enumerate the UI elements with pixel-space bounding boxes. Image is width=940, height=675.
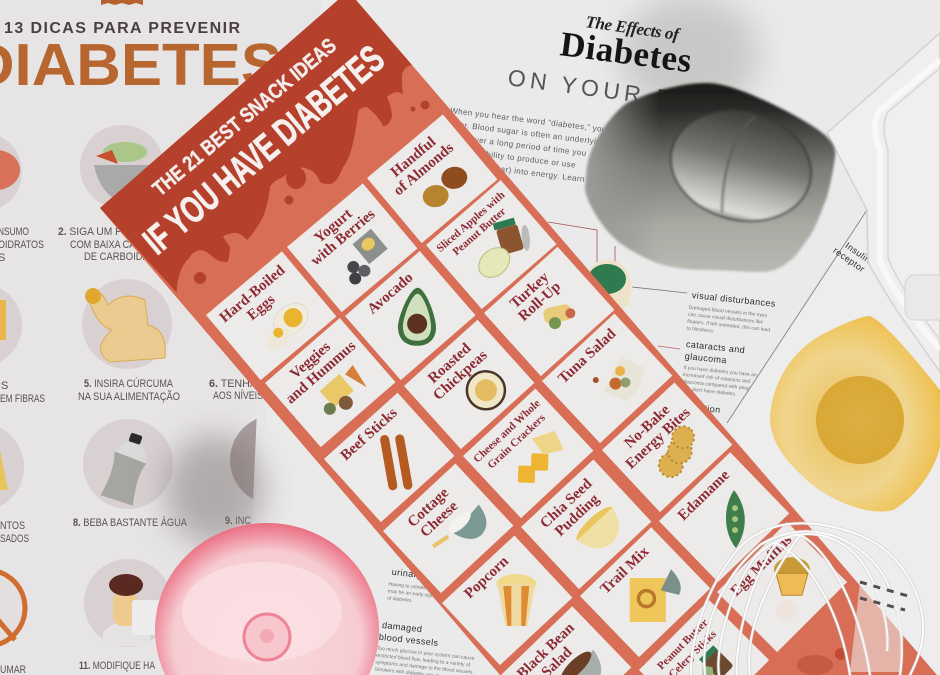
tile: black bean salad [501, 606, 631, 675]
heading: 13 dicas: 13 DICAS PARA PREVENIR [4, 20, 240, 37]
text: lower left notes: blood vessels [378, 632, 439, 648]
text: visual disturbances: can cause visual disturbances like [688, 312, 764, 326]
tip captions: 11. MODIFIQUE HA [79, 660, 156, 672]
tile: veggies and hummus: and Hummus [283, 338, 359, 407]
decorative ribbon [101, 0, 143, 5]
text: cataracts and glaucoma: glaucoma compared with people [682, 379, 754, 392]
tip captions: 6. TENHA [209, 378, 258, 390]
dark melted header [100, 0, 412, 293]
tile: tuna salad: Tuna Salad [555, 325, 620, 387]
tile: turkey roll-up: Roll-Up [516, 279, 564, 325]
icon: muffin and egg [746, 539, 831, 625]
text: insulin receptor: receptor [831, 245, 867, 274]
text: lower left notes: urinary [391, 567, 423, 580]
text: visual disturbances: floaters. If left untreated, this can lead [687, 319, 771, 333]
tube connector [850, 582, 908, 672]
tile: edamame [659, 452, 789, 582]
text: lower left notes: damaged [382, 620, 423, 634]
icon: water bottle [100, 429, 154, 506]
tile: trail mix [580, 527, 710, 657]
intro paragraph [443, 106, 608, 186]
tile: cheese and whole grain crackers: Cheese and Whole [471, 397, 543, 465]
icon: celery and jar [685, 645, 738, 675]
text: cataracts and glaucoma [679, 339, 760, 418]
pink cap [155, 523, 379, 675]
icon: apples and jar [461, 206, 542, 285]
gray pointer line [632, 287, 687, 293]
tile: cottage cheese: Cheese [417, 498, 461, 541]
clear tubing [691, 523, 923, 675]
tile: popcorn [442, 535, 572, 665]
shadow cast by device [620, 0, 760, 115]
tile: popcorn: Popcorn [461, 553, 512, 602]
intro paragraph: y's ability to produce or use [468, 148, 577, 170]
icon: left food [0, 150, 20, 190]
icon: energy bites [646, 422, 708, 482]
tile: yogurt with berries: Yogurt [311, 206, 356, 247]
icon: avocado [398, 287, 437, 346]
tile: chia seed pudding: Chia Seed [537, 475, 596, 532]
text: visual disturbances: Damaged blood vessels in the eyes [688, 305, 768, 319]
red pointer line [658, 346, 680, 349]
side shading [585, 83, 835, 272]
tip captions: COM BAIXA CARGA [70, 239, 156, 251]
text: insulin receptor [831, 236, 873, 274]
icon: salad bowl [94, 142, 152, 202]
heading: on your: ON YOUR B [506, 64, 677, 112]
icon: chickpea bowl [459, 363, 513, 417]
icon: no smoking [0, 570, 25, 646]
text: cataracts and glaucoma: If you have diabetes you have an [683, 365, 757, 379]
text: visual disturbances: visual disturbances [691, 290, 776, 309]
tip captions: 5. INSIRA CÚRCUMA [84, 377, 174, 390]
tile: chia seed pudding [521, 459, 651, 589]
tile: sliced apples with peanut butter [426, 180, 556, 309]
tile: yogurt with berries [287, 183, 417, 312]
tile: egg muffins: Egg Muffins [728, 532, 795, 600]
tip captions: DE CARBOIDRATOS [84, 251, 174, 263]
icon: bean salad [557, 645, 611, 675]
tile: yogurt with berries: with Berries [308, 206, 379, 269]
tile: turkey roll-up [484, 247, 614, 376]
text: visual disturbances: to blindness. [686, 326, 715, 335]
tile: sliced apples with peanut butter: Sliced Apples with [434, 189, 507, 255]
tile: roasted chickpeas: Chickpeas [430, 347, 491, 404]
icon: yogurt and berries [333, 229, 393, 287]
text: cataracts and glaucoma: glaucoma [684, 351, 727, 365]
tip captions: 2. SIGA UM PLANO [58, 226, 150, 238]
icon: edamame pod [726, 490, 745, 548]
icon: crackers [502, 424, 571, 491]
icon: trail mix bag [608, 553, 695, 640]
tile: edamame: Edamame [675, 467, 733, 524]
yellow cell shape [770, 316, 940, 511]
heading: the effects of: The Effects of [584, 12, 682, 44]
tile: hard-boiled eggs: Eggs [244, 292, 278, 324]
tile: handful of almonds: of Almonds [391, 140, 457, 199]
tile: trail mix: Trail Mix [598, 543, 653, 598]
intro paragraph: ar. Blood sugar is often an underlying [459, 120, 606, 147]
cap centre dot [260, 629, 274, 643]
icon: popcorn [496, 574, 536, 626]
glucose monitor device [585, 83, 835, 272]
icon: veggies [312, 364, 373, 423]
device dome [659, 96, 823, 236]
icon: salad bowl [592, 348, 653, 409]
tile: cottage cheese [383, 463, 513, 593]
tile: no-bake energy bites [602, 382, 732, 512]
tile: roasted chickpeas: Roasted [425, 340, 475, 387]
tile: chia seed pudding: Pudding [552, 491, 603, 540]
tile: cottage cheese: Cottage [405, 485, 452, 531]
tip captions: NA SUA ALIMENTAÇÃO [78, 390, 180, 403]
text: lower left notes: of diabetes. [387, 595, 413, 604]
tile: sliced apples with peanut butter: Peanut Butter [450, 205, 508, 258]
text: visual disturbances [686, 290, 776, 341]
tip captions: EM FIBRAS [0, 393, 45, 405]
tile: roasted chickpeas [404, 320, 534, 449]
icon: beef sticks [379, 432, 413, 493]
tile: beef sticks: Beef Sticks [338, 405, 401, 464]
text: insulin receptor: Insulin [843, 240, 873, 265]
tile: veggies and hummus: Veggies [287, 339, 334, 382]
icon: cheese bowl [429, 500, 495, 565]
panel: effects of diabetes sheet [252, 0, 940, 675]
tile: beef sticks [324, 393, 454, 522]
text: cataracts and glaucoma: who don't have diabetes. [681, 386, 737, 398]
tile: peanut butter celery sticks [639, 600, 769, 675]
tip captions [0, 226, 263, 675]
tile: avocado [345, 251, 475, 380]
intro paragraph: When you hear the word “diabetes,” you [450, 106, 607, 134]
panel: 13 dicas sheet [0, 0, 280, 673]
icon: left butter [0, 450, 8, 490]
tip captions: 9. INC [225, 515, 251, 527]
tip captions: AOS NÍVEIS [213, 389, 263, 402]
title line 1: THE 21 BEST SNACK IDEAS [148, 34, 341, 201]
icon: head with brain [588, 260, 631, 320]
text: lower left notes: may be an early sign [387, 588, 434, 599]
tile: handful of almonds [367, 114, 497, 243]
shadow cast by cap [165, 435, 265, 545]
icon: roll-up [536, 293, 579, 335]
icon: person at laptop [103, 574, 162, 646]
tile: hard-boiled eggs [206, 251, 336, 380]
edge of effects sheet [727, 210, 867, 423]
icon: pudding bowl [572, 502, 630, 559]
tile: no-bake energy bites: No-Bake [622, 402, 674, 452]
text: lower left notes: restricted blood flow, leading to a variety of [376, 653, 471, 668]
panel: insulin sheet [727, 208, 940, 675]
connector lines [548, 222, 615, 262]
icon: turmeric root [85, 288, 165, 362]
footer blobs [797, 648, 847, 675]
tile: cheese and whole grain crackers: Grain Crackers [485, 411, 548, 471]
text: cataracts and glaucoma: cataracts and [686, 339, 746, 355]
dome seam [722, 117, 755, 213]
icon: almonds [411, 155, 479, 219]
cap centre ring [244, 614, 290, 660]
text: lower left notes: Too much glucose in your system can cause [376, 646, 475, 662]
tile: turkey roll-up: Turkey [507, 269, 553, 312]
tile: egg muffins [717, 522, 847, 652]
text: lower left notes: Having to urinate [388, 581, 427, 591]
heading: diabetes: Diabetes [558, 24, 694, 80]
text: cataracts and glaucoma: increased risk of cataracts and [683, 372, 751, 385]
tile: cheese and whole grain crackers [463, 388, 593, 518]
icon: left yellow food [0, 300, 6, 340]
intro paragraph: over a long period of time you [469, 135, 587, 158]
text: lower left notes [374, 566, 493, 675]
tile: avocado: Avocado [365, 270, 416, 318]
tile: peanut butter celery sticks: Peanut Butter [655, 617, 711, 672]
tip captions: 8. BEBA BASTANTE ÁGUA [73, 516, 188, 529]
tile: handful of almonds: Handful [388, 134, 439, 181]
tile: no-bake energy bites: Energy Bites [623, 405, 694, 472]
tile: tuna salad [542, 313, 672, 443]
tip circles [0, 125, 257, 647]
plastic tray [827, 33, 940, 372]
tile: veggies and hummus [265, 318, 395, 447]
yellow cell nucleus [816, 376, 904, 464]
text: cataracts and glaucoma: infection [683, 401, 721, 415]
tip captions: SADOS [0, 533, 29, 545]
icon: egg [255, 297, 316, 354]
tile: hard-boiled eggs: Hard-Boiled [217, 262, 289, 326]
dark drips and droplets [194, 100, 430, 284]
tip captions: NTOS [0, 520, 25, 532]
cap highlight [182, 562, 342, 662]
intro paragraph: (sugar) into energy. Learn [483, 163, 585, 184]
